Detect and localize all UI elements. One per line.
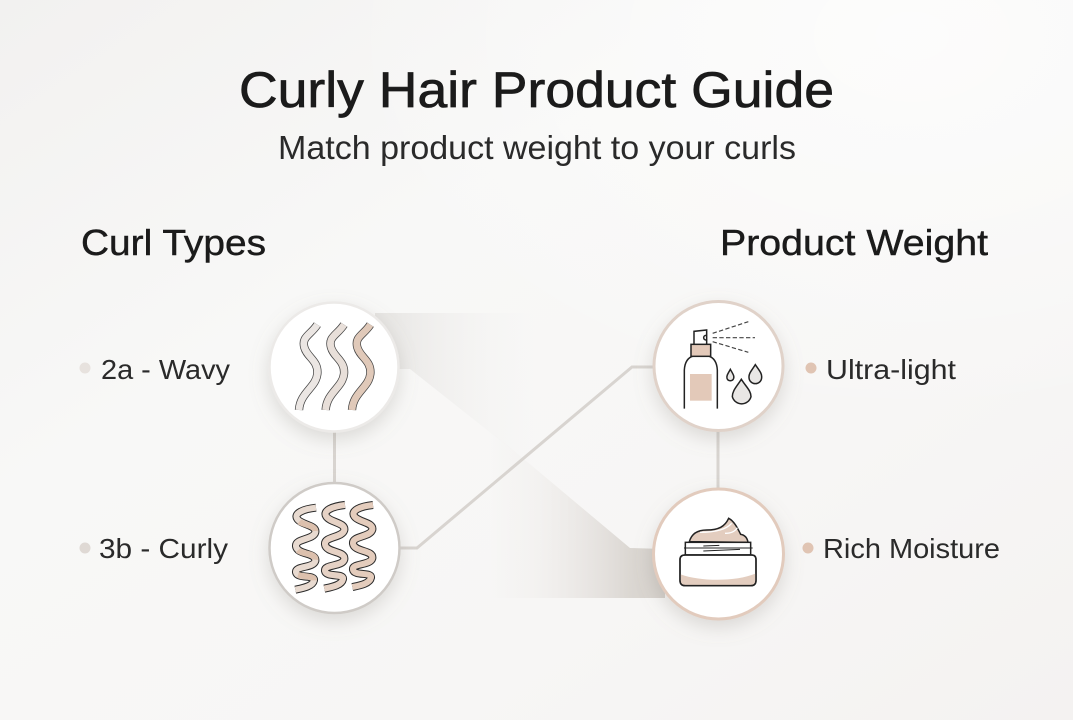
subtitle: Match product weight to your curls [278, 129, 796, 166]
title: Curly Hair Product Guide [239, 62, 834, 118]
connector: 2a to 3b [333, 430, 336, 485]
ribbon: upper band fading right [375, 313, 535, 468]
heading: product weight: Product Weight [720, 222, 988, 263]
connector: ultra-light to rich moisture [716, 430, 720, 490]
icon: spray bottle [654, 302, 783, 430]
icon: curly hair [270, 483, 400, 613]
ribbon: lower band fading left [490, 431, 665, 598]
label: rich moisture: Rich Moisture [823, 533, 1000, 564]
icon: wavy hair [270, 302, 398, 432]
label: 2a wavy: 2a - Wavy [101, 354, 230, 385]
connector: 3b to ultra-light [398, 367, 656, 548]
label: ultra-light: Ultra-light [826, 354, 956, 385]
label: 3b curly: 3b - Curly [99, 533, 228, 564]
heading: curl types: Curl Types [81, 222, 266, 263]
icon: cream jar [654, 489, 784, 619]
